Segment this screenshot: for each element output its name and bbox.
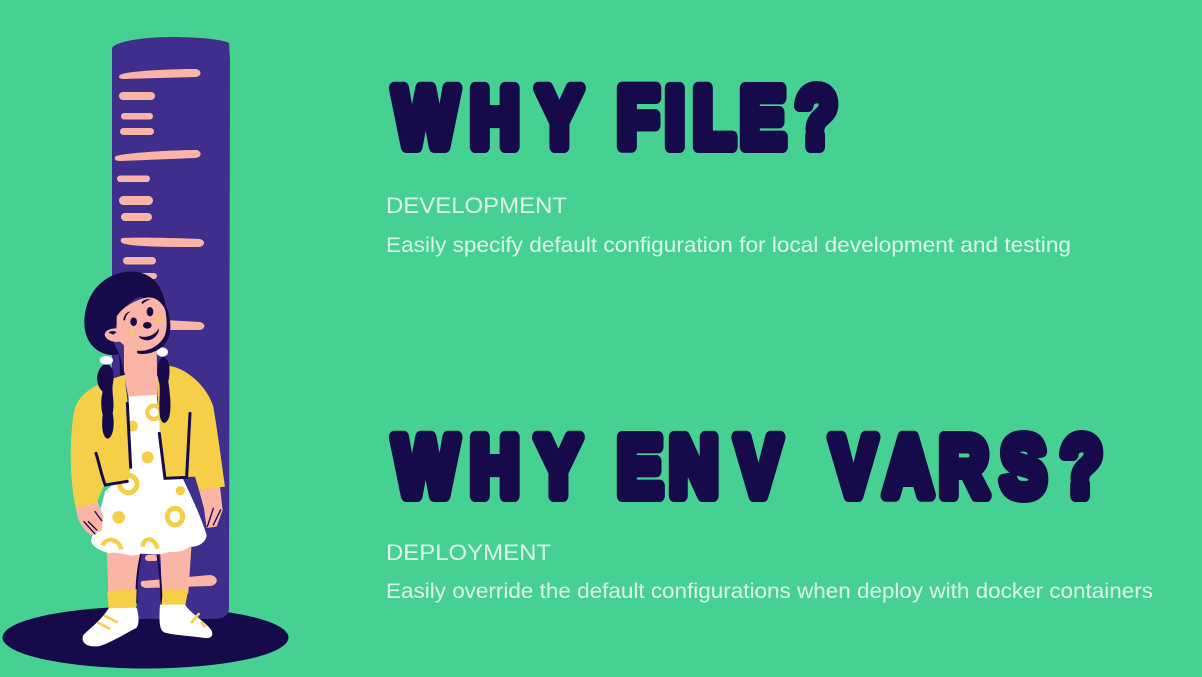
cheek freckles xyxy=(130,329,134,334)
girl figure xyxy=(71,272,225,646)
finger lines xyxy=(84,508,221,534)
heading: why env vars: WHY ENV VARS? xyxy=(394,420,1102,514)
socks xyxy=(107,589,188,609)
label: development: DEVELOPMENT xyxy=(386,193,567,218)
face outline xyxy=(137,300,170,354)
illustration: girl measuring height xyxy=(2,37,288,668)
description: deployment: Easily override the default configurations when deploy with docker containers xyxy=(386,580,1153,603)
shoe stripes xyxy=(98,614,205,629)
dress xyxy=(91,395,207,555)
dress polka dots and rings xyxy=(103,406,185,549)
ruler tick marks xyxy=(115,69,217,588)
right braid xyxy=(157,357,170,423)
hands xyxy=(76,487,223,535)
inner leg shadows xyxy=(136,553,161,603)
label: deployment: DEPLOYMENT xyxy=(386,540,551,565)
jacket edge lines xyxy=(96,403,190,485)
eyes, nose, mouth and eyebrows xyxy=(108,299,159,340)
hair xyxy=(84,272,166,355)
ground shadow ellipse xyxy=(2,606,288,668)
height ruler column xyxy=(112,37,230,619)
left braid xyxy=(97,363,114,439)
shoes xyxy=(83,605,212,646)
heading: why file: WHY FILE? xyxy=(394,71,837,165)
legs xyxy=(107,543,192,593)
jacket xyxy=(71,366,225,508)
hair back strand xyxy=(119,353,125,375)
description: development: Easily specify default configuration for local development and testing xyxy=(386,234,1071,257)
neck xyxy=(124,345,157,397)
hair ties xyxy=(100,356,113,365)
face xyxy=(105,297,168,353)
